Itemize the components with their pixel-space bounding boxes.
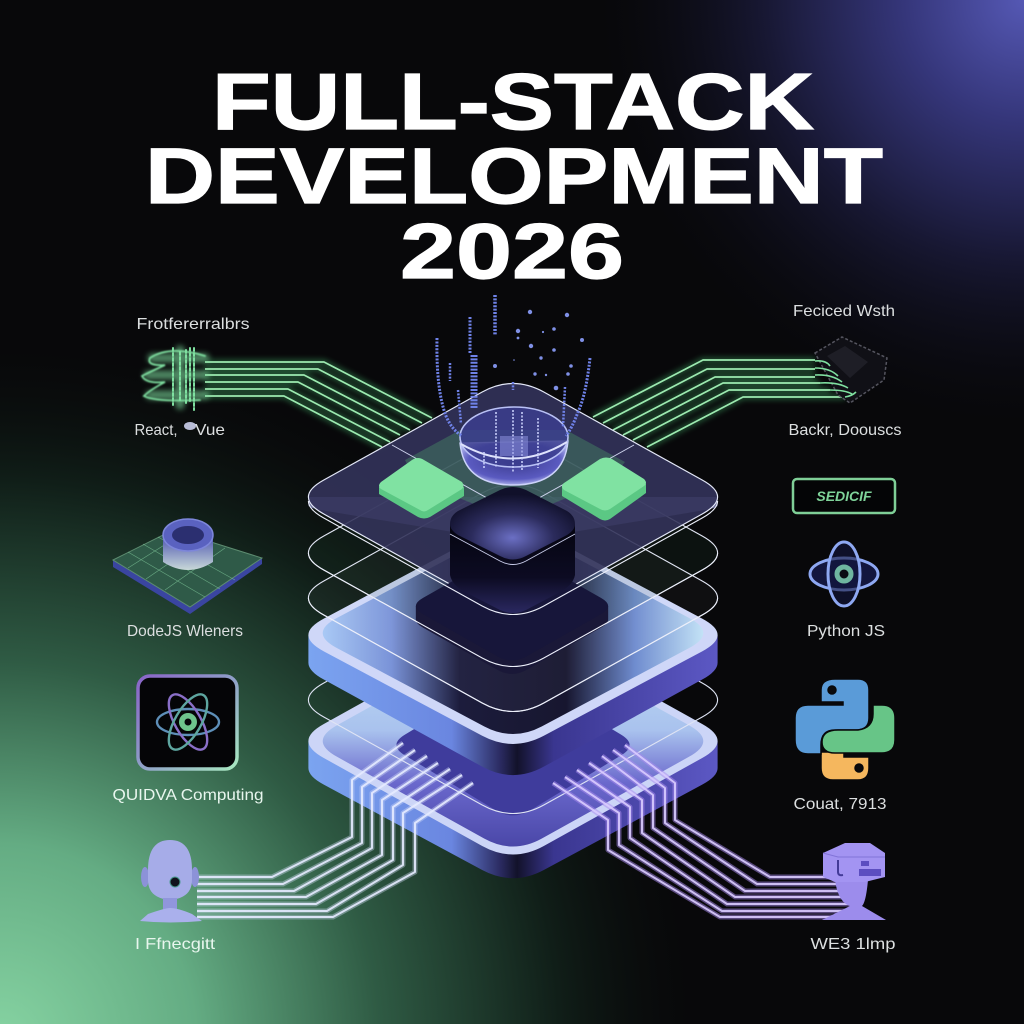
label: backend: Backr, Doouscs [788, 422, 902, 439]
central black cube and base [416, 487, 608, 674]
label: python js: Python JS [807, 623, 885, 640]
lower solid platform [308, 628, 718, 878]
label: frontend: Frotfererralbrs [136, 316, 250, 333]
icon: quantum atom card [138, 676, 237, 769]
purple chip under upper platform [396, 675, 630, 815]
icon: purple device [822, 843, 886, 920]
bottom left connector lines [197, 743, 473, 917]
title: FULL-STACK [212, 57, 814, 146]
label: quantum computing: QUIDVA Computing [112, 787, 264, 804]
upper solid platform [308, 526, 718, 775]
floating data streaks and particles [437, 295, 590, 436]
icon: frontend green wave [142, 348, 205, 410]
bottom right connector lines [553, 745, 850, 917]
icon: dark circuit chip [815, 337, 887, 403]
green module left [379, 458, 464, 518]
title [145, 57, 883, 295]
label: react vue [134, 422, 225, 439]
label: react vue: Vue [195, 422, 225, 439]
outline layer four [308, 586, 718, 814]
label: node: DodeJS Wleners [127, 623, 243, 640]
badge: sedicif [793, 479, 895, 513]
label: feature width: Feciced Wsth [793, 303, 895, 320]
title: DEVELOPMENT [145, 131, 883, 220]
icon: python logo [795, 679, 895, 780]
icon: iso grid chip [113, 519, 262, 614]
glass dome with data [460, 407, 568, 485]
glass layer outlines [308, 440, 718, 712]
label: web3: WE3 1lmp [810, 936, 896, 953]
label: react vue: React, [134, 422, 178, 439]
outlines over cube base [308, 501, 718, 712]
badge: sedicif: SEDICIF [816, 488, 872, 504]
top glass plate [308, 384, 718, 610]
green module right [562, 458, 646, 520]
label: count: Couat, 7913 [794, 796, 887, 813]
icon: robot microphone [140, 840, 202, 922]
green data lines right [593, 360, 845, 447]
title: 2026 [400, 207, 624, 295]
green data lines left [205, 362, 432, 447]
icon: orbit atom [810, 542, 878, 606]
label: fragment: I Ffnecgitt [135, 936, 216, 953]
